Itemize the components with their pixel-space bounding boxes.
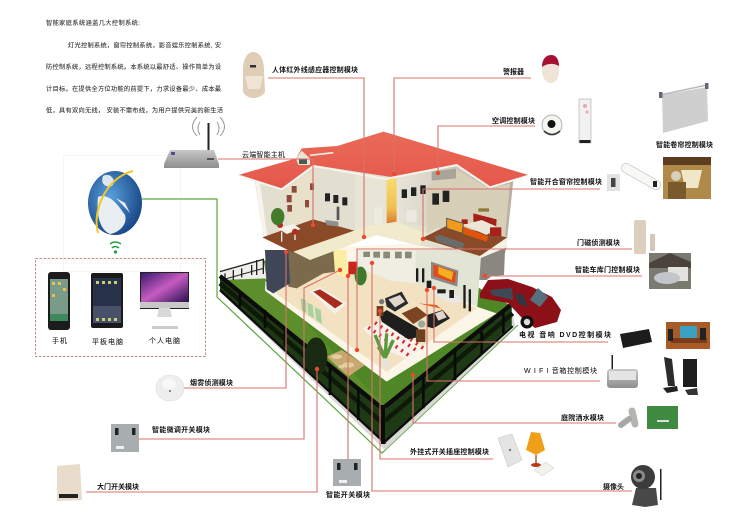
intro text block: 防控制系统，远程控制系统。本系统以最舒适、操作简单为设 bbox=[46, 63, 221, 71]
icon: wifi router bbox=[607, 355, 638, 388]
intro text block: 智能家庭系统涵盖几大控制系统: bbox=[46, 19, 140, 27]
right wall bbox=[416, 250, 482, 307]
garage wall bbox=[482, 250, 505, 277]
label: PIR sensor: 人体红外线感应器控制模块 bbox=[272, 65, 358, 74]
back fence bbox=[220, 259, 263, 282]
wall art bbox=[325, 185, 449, 205]
photo: curtain room bbox=[663, 157, 711, 199]
TV bbox=[431, 262, 458, 287]
connector lines and sensor points bbox=[86, 78, 642, 492]
intro text block: 灯光控制系统，窗帘控制系统，影音娱乐控制系统, 安 bbox=[68, 42, 221, 50]
label: phone: 手机 bbox=[52, 336, 67, 345]
icon: curtain switch bbox=[607, 174, 620, 191]
left fence bbox=[220, 275, 383, 442]
label: dimmer module: 智能微调开关模块 bbox=[152, 425, 210, 434]
photo: home theater bbox=[666, 322, 710, 349]
icon: air conditioner unit bbox=[579, 99, 591, 143]
icon: tablet bbox=[91, 273, 123, 328]
floors bbox=[262, 219, 354, 253]
connector: smart switch bbox=[346, 274, 350, 460]
bed bbox=[473, 213, 497, 228]
label: air conditioner module: 空调控制模块 bbox=[492, 116, 535, 125]
icon: dimmer switch bbox=[111, 424, 139, 452]
label: plug socket module: 外挂式开关插座控制模块 bbox=[410, 447, 489, 456]
icon: roller blind bbox=[659, 83, 708, 133]
connector: garage door bbox=[483, 274, 642, 278]
study table bbox=[325, 220, 338, 227]
floor plant bbox=[375, 333, 393, 358]
label: smart curtain module: 智能开合窗帘控制模块 bbox=[530, 177, 602, 186]
label: tablet: 平板电脑 bbox=[92, 337, 123, 346]
bathroom fixtures bbox=[407, 210, 417, 222]
intro text block: 计目标。在提供全方位功能的前提下，力求设备最少、成本最 bbox=[46, 85, 221, 93]
garden gate shrub bbox=[305, 337, 327, 376]
label: smoke detector module: 烟雾侦测模块 bbox=[190, 378, 233, 387]
roof bbox=[238, 132, 528, 189]
dining set upstairs bbox=[278, 224, 301, 234]
photo: garage bbox=[649, 253, 691, 289]
stones bbox=[327, 350, 365, 377]
icon: AC control module bbox=[542, 115, 562, 135]
connector: WIFI speaker bbox=[425, 288, 600, 381]
upper level and roof bbox=[238, 132, 528, 277]
panel: client devices bbox=[36, 258, 206, 356]
icon: globe bbox=[88, 171, 142, 235]
label: sprinkler module: 庭院洒水模块 bbox=[561, 413, 604, 422]
green network line: globe to house perimeter bbox=[142, 199, 518, 453]
connector: dimmer bbox=[138, 268, 342, 439]
label: desktop computer: 个人电脑 bbox=[149, 336, 180, 345]
icon: smart switch bbox=[333, 459, 361, 486]
connector: gate bbox=[86, 367, 319, 492]
intro text block bbox=[46, 19, 223, 114]
label: camera: 摄像头 bbox=[603, 482, 624, 491]
icon: alarm siren bbox=[542, 55, 559, 83]
sofa set bbox=[380, 310, 418, 339]
icon: PIR motion sensor bbox=[243, 52, 265, 98]
dining bbox=[309, 287, 347, 314]
label: alarm: 警报器 bbox=[503, 67, 524, 76]
icon: gate switch box bbox=[57, 464, 82, 501]
connector: camera bbox=[370, 261, 632, 491]
right fence bbox=[385, 303, 512, 442]
label: door sensor module: 门磁侦测模块 bbox=[577, 238, 620, 247]
icon: wifi signal bbox=[110, 242, 121, 253]
label: smart switch module: 智能开关模块 bbox=[326, 490, 370, 499]
icon: table lamp bbox=[526, 432, 554, 476]
icon: speakers bbox=[663, 357, 698, 395]
icon: door magnetic sensor bbox=[634, 220, 655, 254]
connector: door sensor bbox=[355, 249, 632, 352]
connector: PIR sensor bbox=[268, 78, 366, 239]
intro text block: 低，具有双向无线， 安装不需布线，为用户提供完美的新生活 bbox=[46, 106, 223, 114]
rug bbox=[363, 317, 423, 358]
icon: desktop computer bbox=[140, 272, 189, 329]
label: garage door module: 智能车库门控制模块 bbox=[575, 265, 640, 274]
label: gate module: 大门开关模块 bbox=[97, 482, 139, 491]
lower level: garden and ground floor bbox=[220, 243, 515, 450]
connector: TV audio DVD bbox=[432, 286, 608, 342]
icon: curtain motor bbox=[626, 168, 657, 187]
icon: smoke detector bbox=[156, 375, 184, 401]
label: TV audio DVD module: 电视 音响 DVD控制模块 bbox=[519, 330, 611, 339]
icon: sprinkler valve bbox=[621, 411, 635, 425]
connector: cloud host bbox=[218, 159, 315, 227]
connector: alarm bbox=[392, 78, 531, 176]
faint frame behind globe bbox=[64, 156, 180, 272]
connector: sprinkler bbox=[411, 373, 616, 423]
connector: air conditioner bbox=[436, 126, 535, 175]
icon: plug socket bbox=[498, 434, 522, 467]
connector: smoke detector bbox=[184, 250, 288, 388]
connector: curtain bbox=[421, 189, 600, 241]
kitchen bbox=[287, 250, 345, 288]
photo: lawn bbox=[647, 406, 678, 429]
dormer bbox=[310, 153, 333, 155]
car bbox=[480, 279, 561, 328]
icon: IP camera bbox=[631, 465, 662, 507]
label: cloud host: 云端智能主机 bbox=[242, 150, 285, 159]
label: smart roller blind module: 智能卷帘控制模块 bbox=[656, 140, 713, 149]
icon: cloud host router bbox=[164, 117, 224, 168]
upper walls bbox=[255, 165, 513, 259]
connector: plug socket bbox=[378, 309, 493, 459]
back wall / shelves bbox=[357, 250, 417, 283]
house illustration bbox=[220, 132, 528, 450]
label: WIFI speaker module: W I F I 音箱控制模块 bbox=[524, 366, 597, 375]
red door and plant bbox=[348, 262, 358, 274]
icon: phone bbox=[48, 272, 70, 330]
icon: DVD box bbox=[620, 329, 652, 348]
